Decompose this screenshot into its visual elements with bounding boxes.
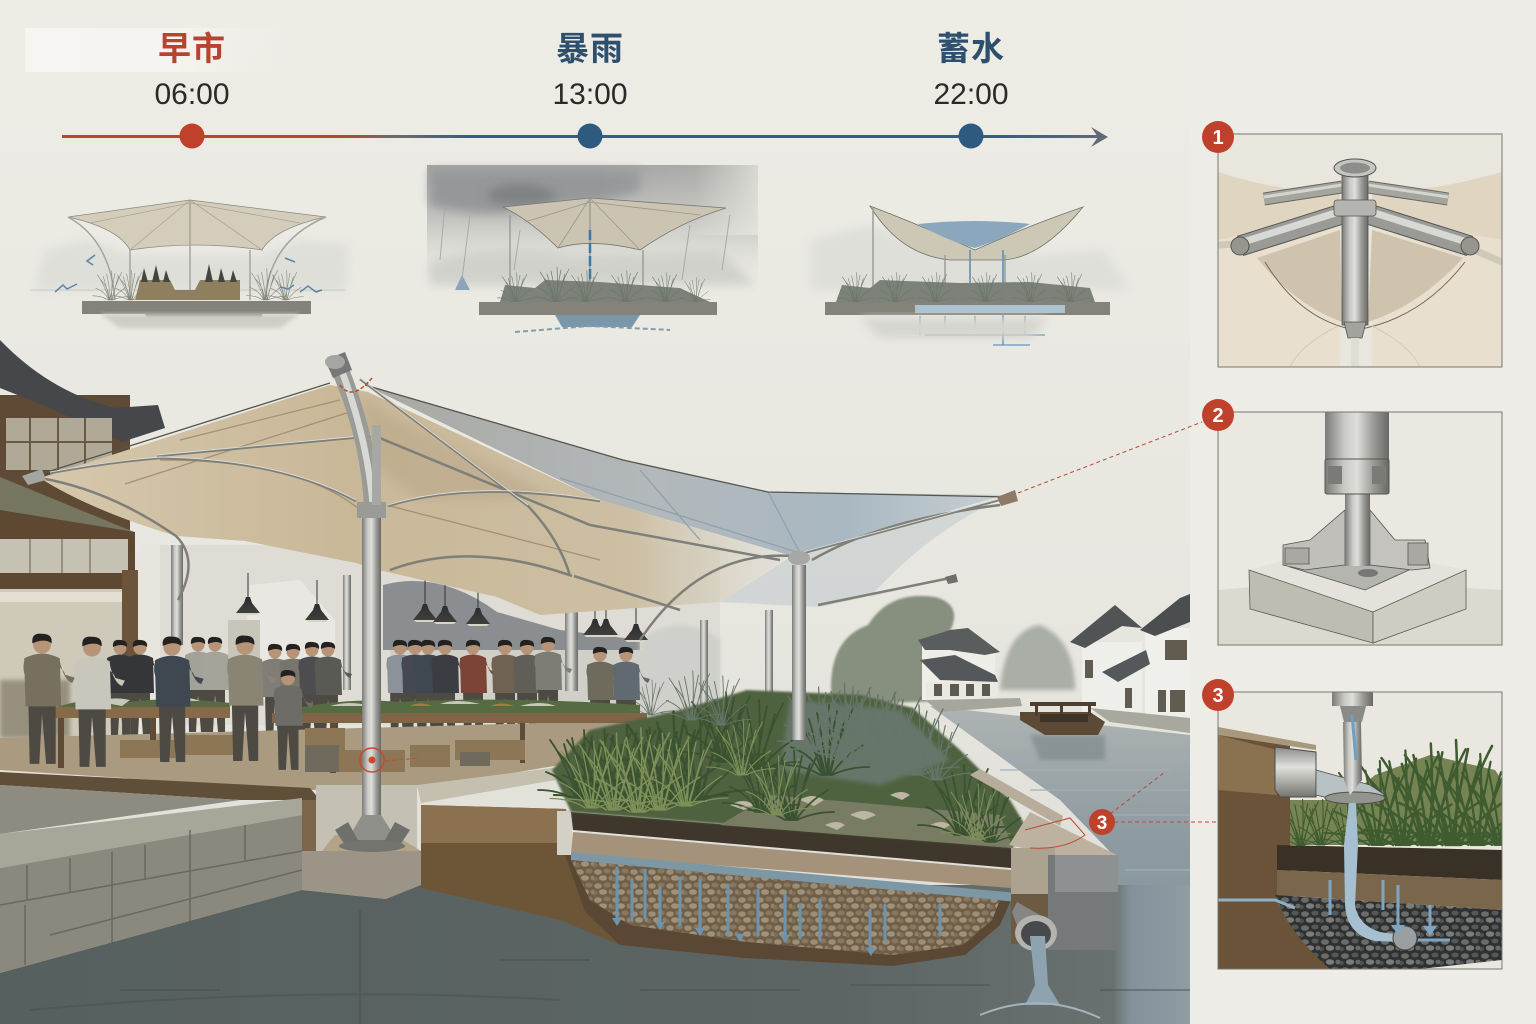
heading: morning market: 早市 <box>158 30 226 67</box>
timeline marker 06:00 <box>180 124 204 148</box>
heading: rainstorm: 暴雨 <box>556 30 624 67</box>
thumbnail: water storage scene <box>810 206 1130 345</box>
stored water film <box>571 852 1017 902</box>
tube ribs <box>40 379 1010 640</box>
fabric underside <box>40 385 790 615</box>
dark soil layer <box>1277 845 1502 880</box>
catch disc <box>1325 792 1385 804</box>
badge 2: 2 <box>1212 405 1224 427</box>
mast base fitting <box>335 815 410 852</box>
leader to detail 3 <box>1110 772 1218 822</box>
detail panel 1: canopy hub joint <box>1218 134 1502 368</box>
rear canopy columns <box>171 536 773 710</box>
concrete plinth <box>1291 580 1429 612</box>
trees on far bank <box>831 596 1075 705</box>
ring: base joint <box>360 748 420 772</box>
front arms <box>1240 210 1470 246</box>
main mast with curved head <box>325 352 386 822</box>
central column <box>1342 170 1368 325</box>
time: 06:00: 06:00 <box>154 78 230 111</box>
outlet pipe <box>1012 902 1057 951</box>
frame edge cables <box>28 383 1010 497</box>
tan soil layer <box>1277 870 1502 910</box>
label backdrop: morning market <box>25 28 300 72</box>
badge 2 <box>1202 399 1234 431</box>
soil cut section under the planter <box>421 805 1017 966</box>
collar <box>1325 459 1389 494</box>
shop fascia <box>0 510 135 589</box>
glazed shop front <box>0 589 123 738</box>
leader to detail 2 <box>1018 422 1202 493</box>
ring: connector 1 <box>340 378 372 392</box>
membrane canopy <box>22 352 1018 852</box>
ground <box>1218 587 1502 644</box>
infiltration arrows <box>617 868 940 950</box>
badge 1 <box>1202 121 1234 153</box>
soil lens under the reservoir <box>565 855 1012 966</box>
timeline arrow <box>62 127 1108 147</box>
market crowd, back row <box>106 637 650 742</box>
translucent lower membrane <box>720 497 1005 607</box>
upper column <box>1325 412 1389 460</box>
riverside concrete edge and outlet pipe <box>970 769 1118 1018</box>
badge 3 in scene: 3 <box>1097 813 1107 834</box>
drain mark <box>1025 818 1085 848</box>
detail panel 3: drain and gravel reservoir <box>1218 692 1502 970</box>
left stone terrace and wall <box>0 767 560 1000</box>
badge 3 <box>1202 679 1234 711</box>
base plate <box>1288 566 1410 590</box>
lower column <box>1345 494 1370 566</box>
right tip fitting <box>997 490 1018 506</box>
thumbnail: rainstorm scene <box>427 165 758 332</box>
market floor <box>0 720 650 790</box>
dark canal water <box>0 885 1190 1024</box>
lower green roof <box>0 477 134 535</box>
concrete pier <box>316 785 417 851</box>
rear arms <box>1264 185 1448 199</box>
steel gutter <box>1275 747 1316 797</box>
time: 13:00: 13:00 <box>552 78 628 111</box>
bracket arms <box>1283 510 1345 570</box>
timeline marker 13:00 <box>578 124 602 148</box>
outlet fitting <box>1393 926 1417 950</box>
upper lattice windows <box>6 418 112 470</box>
gravel reservoir <box>571 860 1000 955</box>
far-bank houses, left <box>918 628 1022 712</box>
falling water <box>1344 803 1394 942</box>
sand layer <box>571 832 1011 888</box>
badge 3: 3 <box>1212 685 1224 707</box>
soil layer <box>571 812 1013 868</box>
hanging lamps <box>236 573 648 642</box>
detail panel 2: column base on concrete plinth <box>1218 412 1502 645</box>
translucent glass roof <box>365 385 1005 556</box>
market crowd, front row <box>23 634 313 770</box>
left soil block <box>1218 727 1330 968</box>
far-bank houses, right <box>1070 594 1190 733</box>
badge 1: 1 <box>1212 127 1224 149</box>
vendor tables with vegetables <box>50 698 647 773</box>
planter vegetation <box>538 671 1025 848</box>
timeline header <box>25 28 1108 148</box>
thumbnail: morning market scene <box>30 200 350 328</box>
callout markers and leader lines <box>340 378 1218 848</box>
outflow stream <box>1025 936 1060 1005</box>
time: 22:00: 22:00 <box>933 78 1009 111</box>
grass mass <box>1290 738 1502 846</box>
moored boats <box>1020 702 1105 735</box>
left timber building <box>0 340 165 740</box>
left tip fitting <box>22 469 46 485</box>
second mast <box>788 551 810 740</box>
upper roof <box>0 340 165 442</box>
badge 3 in scene <box>1089 809 1115 835</box>
downpipe <box>1343 722 1362 795</box>
market hall back wall <box>160 545 720 725</box>
timeline marker 22:00 <box>958 124 984 148</box>
heading: water storage: 蓄水 <box>937 30 1005 67</box>
gravel layer <box>1275 895 1502 969</box>
river and far bank <box>831 594 1190 1024</box>
